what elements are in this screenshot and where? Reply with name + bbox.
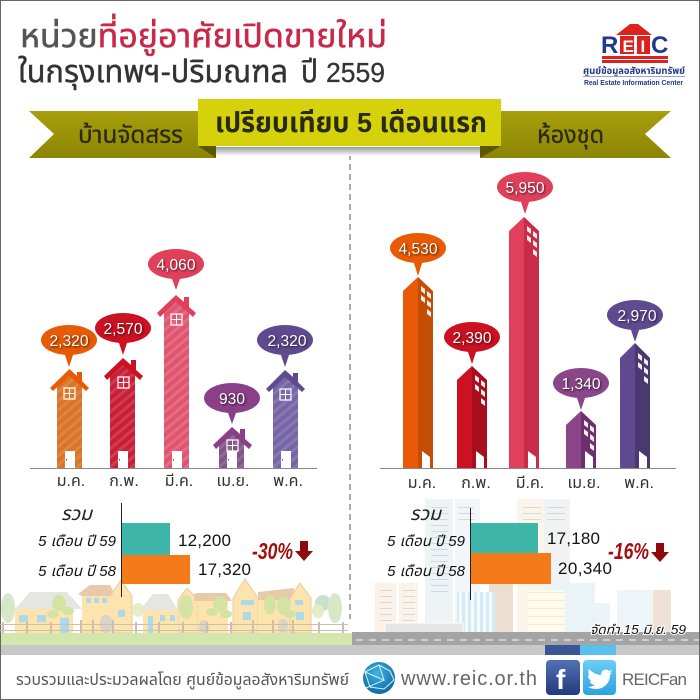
ribbon shadow — [216, 147, 480, 156]
house: January — [41, 325, 97, 468]
bar: 5 months 2559 — [470, 523, 538, 553]
month labels: ก.พ. — [109, 473, 139, 490]
icon: down arrow — [651, 543, 669, 562]
logo: REIC: R — [601, 32, 618, 59]
house: April — [204, 383, 260, 468]
house: March: 4,060 — [156, 257, 196, 274]
building: April — [553, 368, 609, 468]
icon: facebook: f — [556, 664, 566, 695]
row labels: 5 เดือน ปี 59 — [387, 533, 466, 550]
house: May: 2,320 — [267, 333, 307, 350]
month labels: มี.ค. — [165, 473, 193, 490]
title: ปี — [301, 54, 318, 89]
month labels: ม.ค. — [408, 475, 436, 492]
month labels — [57, 473, 303, 490]
building: May: 2,970 — [617, 308, 657, 325]
month labels: มี.ค. — [516, 475, 544, 492]
bar: 5 months 2559 — [121, 523, 170, 555]
values: 17,180 — [547, 529, 600, 548]
logo: REIC — [583, 24, 685, 87]
ribbon right tail — [480, 111, 671, 158]
month labels: ก.พ. — [461, 475, 491, 492]
fence — [0, 620, 348, 633]
axis — [380, 468, 676, 469]
center dashed divider — [349, 154, 351, 619]
chart: condominium units by month — [380, 172, 676, 492]
house: February: 2,570 — [103, 321, 143, 338]
axis — [121, 503, 122, 597]
website: www.reic.or.th — [400, 668, 537, 690]
ground: lawn — [1, 633, 352, 645]
axis — [470, 508, 471, 600]
ribbon banner — [29, 99, 671, 158]
building: May — [607, 300, 663, 468]
house: February — [95, 313, 151, 468]
date note: จัดทำ 15 มิ.ย. 59 — [590, 622, 686, 637]
ground: pavement strip — [1, 645, 699, 655]
summary chart: housing totals — [38, 503, 313, 597]
building: March — [497, 172, 553, 468]
row labels: 5 เดือน ปี 59 — [38, 533, 117, 550]
total label: รวม — [410, 504, 442, 525]
title: หน่วยที่อยู่อาศัยเปิดขายใหม่ — [20, 13, 387, 56]
house: March — [148, 249, 204, 468]
icon: twitter — [583, 660, 616, 695]
row labels: 5 เดือน ปี 58 — [38, 563, 117, 580]
row labels — [387, 533, 466, 580]
title: ในกรุงเทพฯ-ปริมณฑล — [18, 54, 288, 90]
change: -30%: -30% — [252, 538, 293, 564]
social colour tabs — [545, 645, 616, 655]
title — [18, 13, 387, 90]
values: 20,340 — [558, 559, 612, 578]
row labels: 5 เดือน ปี 58 — [387, 563, 466, 580]
logo: REIC: I — [640, 37, 645, 56]
row labels — [38, 533, 117, 580]
title: 2559 — [326, 57, 385, 88]
ribbon folds — [198, 146, 216, 158]
values: 12,200 — [178, 531, 231, 550]
icon: globe — [363, 662, 395, 694]
logo: REIC: C — [651, 32, 668, 59]
values: 17,320 — [198, 560, 251, 579]
building: March: 5,950 — [505, 180, 545, 197]
illustration: village scene — [0, 579, 348, 633]
values — [178, 531, 251, 579]
bar: 5 months 2558 — [470, 553, 551, 584]
logo: REIC: E — [622, 37, 634, 56]
axis — [30, 468, 317, 469]
values — [547, 529, 612, 578]
month labels: เม.ย. — [568, 475, 600, 492]
month labels: ม.ค. — [57, 473, 85, 490]
chart: housing units by month — [30, 249, 317, 490]
summary chart: condominium totals — [387, 504, 669, 600]
building: February: 2,390 — [452, 330, 492, 347]
month labels: พ.ค. — [273, 473, 303, 490]
social handle: REICFan — [622, 670, 687, 689]
label: detached houses: บ้านจัดสรร — [78, 122, 183, 149]
illustration: city skyline — [375, 499, 671, 633]
icon: down arrow — [295, 541, 313, 561]
month labels — [408, 475, 654, 492]
building: January: 4,530 — [398, 241, 438, 258]
building: February — [444, 322, 500, 468]
logo: REIC: ศูนย์ข้อมูลอสังหาริมทรัพย์ — [583, 64, 685, 77]
month labels: พ.ค. — [624, 475, 654, 492]
house: January: 2,320 — [49, 333, 89, 350]
logo: REIC: Real Estate Information Center — [584, 80, 683, 87]
icon: facebook — [546, 660, 580, 695]
building: April: 1,340 — [561, 376, 601, 393]
bar: 5 months 2558 — [121, 555, 190, 584]
footer credit: รวบรวมและประมวลผลโดย ศูนย์ข้อมูลอสังหาริมทรัพย์ — [16, 672, 349, 689]
house: April: 930 — [219, 391, 245, 408]
ground: street — [352, 632, 699, 645]
change: -16%: -16% — [608, 538, 649, 564]
label: compare first 5 months: เปรียบเทียบ 5 เดือนแรก — [215, 107, 487, 138]
building: January — [390, 233, 446, 468]
label: condominiums: ห้องชุด — [537, 122, 604, 150]
month labels: เม.ย. — [217, 473, 249, 490]
house: May — [257, 325, 313, 468]
ribbon center — [198, 99, 501, 146]
ribbon left tail — [29, 111, 216, 158]
total label: รวม — [61, 504, 93, 525]
